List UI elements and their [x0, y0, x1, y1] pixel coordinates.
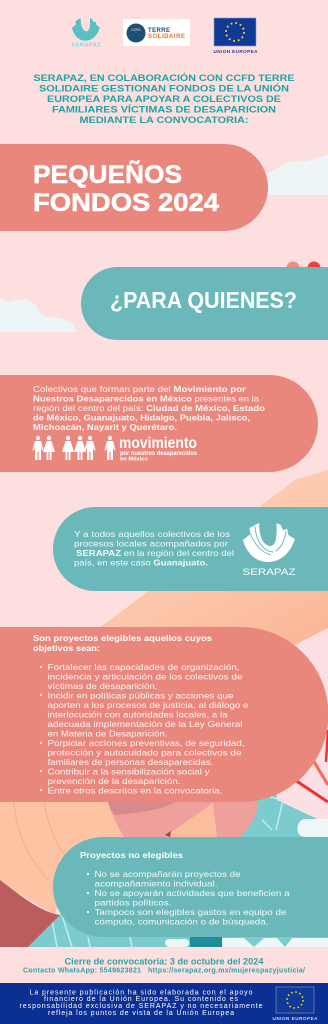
- text: disclaimer: financiero de la Unión Europea. Su contenido es: [44, 996, 239, 1003]
- logo: Unión Europea flag: [214, 18, 258, 54]
- logo: SERAPAZ header: SERAPAZ: [72, 42, 101, 48]
- panel: Pequeños Fondos title: FONDOS 2024: [33, 189, 219, 217]
- list: elegibles: prevención de la desaparición.: [48, 776, 180, 786]
- logo: CCFD Terre Solidaire: [123, 19, 190, 46]
- text: disclaimer: refleja los puntos de vista de la Unión Europea: [48, 1010, 234, 1017]
- list: elegibles: Porpiciar acciones preventivas, de seguridad,: [48, 738, 245, 748]
- list: elegibles: incidencia y articulación de los colectivos de: [48, 672, 243, 682]
- panel: Pequeños Fondos title: PEQUEÑOS: [33, 159, 182, 189]
- list: elegibles: protección y autocuidado para colectivos de: [48, 748, 242, 758]
- list: elegibles: Fortalecer las capacidades de organización,: [48, 662, 239, 672]
- icon: people figures: [32, 436, 116, 460]
- logo: CCFD Terre Solidaire: TERRE: [148, 28, 170, 34]
- logo: Unión Europea footer: UNION EUROPEA: [272, 1016, 318, 1021]
- list: no elegibles: cómputo, comunicación o de búsqueda.: [94, 916, 268, 926]
- text: elegibles heading: Son proyectos elegibles aquellos cuyos: [33, 633, 212, 643]
- list: elegibles: [40, 662, 249, 796]
- list: elegibles: aporten a los procesos de justicia, al diálogo e: [48, 700, 249, 710]
- intro heading: [34, 72, 294, 125]
- logo: Unión Europea footer: [272, 987, 318, 1021]
- list: elegibles: en Materia de Desaparición.: [48, 728, 168, 738]
- footer band: pink: [0, 947, 328, 983]
- logo: Movimiento: por nuestros desaparecidos: [120, 451, 198, 457]
- text: colectivos description: Michoacán, Nayarit y Querétaro.: [33, 422, 177, 432]
- logo: Movimiento: en México: [120, 456, 149, 462]
- list: elegibles: Contribuir a la sensibilización social y: [48, 766, 210, 776]
- list: no elegibles: acompañamiento individual.: [94, 878, 218, 888]
- panel: colectivos: [0, 375, 318, 472]
- intro heading: SOLIDAIRE GESTIONAN FONDOS DE LA UNIÓN: [39, 82, 289, 94]
- text: no elegibles heading: Proyectos no elegibles: [80, 850, 183, 860]
- logo: SERAPAZ: SERAPAZ: [242, 567, 296, 578]
- list: elegibles: víctimas de desaparición.: [48, 681, 158, 691]
- text: cierre de convocatoria: Cierre de convocatoria: 3 de octubre del 2024: [64, 956, 264, 966]
- background illustration: [0, 470, 328, 947]
- decorative hearts: [286, 262, 320, 274]
- list: elegibles: adecuada implementación de la Ley General: [48, 719, 243, 729]
- decorative cloud right: [262, 155, 328, 195]
- logo: CCFD Terre Solidaire: SOLIDAIRE: [148, 34, 185, 40]
- text: disclaimer: La presente publicación ha sido elaborada con el apoyo: [30, 990, 253, 996]
- list: elegibles: familiares de personas desaparecidas.: [48, 757, 213, 767]
- text: colectivos description: Colectivos que forman parte del Movimiento por: [33, 384, 237, 394]
- text: contacto: Contacto WhatsApp: 5549623821 https://serapaz.org.mx/mujerespazyjusticia/: [23, 968, 305, 974]
- list: elegibles: Incidir en políticas públicas y acciones que: [48, 690, 234, 700]
- list: elegibles: Entre otros descritos en la convocatoria.: [48, 786, 222, 796]
- intro heading: MEDIANTE LA CONVOCATORIA:: [80, 114, 248, 125]
- panel: ¿Para quienes?: ¿PARA QUIENES?: [110, 287, 297, 313]
- list: no elegibles: No se apoyarán actividades que beneficien a: [94, 888, 290, 898]
- footer band: blue: [0, 983, 328, 1024]
- logo: Movimiento: movimiento: [119, 435, 197, 452]
- panel: ¿Para quienes?: [81, 267, 328, 340]
- list: no elegibles: [87, 869, 290, 926]
- text: procesos locales: Y a todos aquellos colectivos de los: [74, 529, 230, 539]
- text: elegibles heading: objetivos sean:: [33, 643, 100, 653]
- text: disclaimer: [20, 990, 263, 1017]
- text: colectivos description: Nuestros Desaparecidos en México presentes en la: [33, 394, 253, 404]
- text: procesos locales: SERAPAZ en la región del centro del: [76, 548, 222, 558]
- panel: proyectos no elegibles: [53, 837, 328, 937]
- text: procesos locales: procesos locales acompañados por: [74, 538, 228, 548]
- panel: proyectos elegibles: [0, 627, 328, 802]
- text: disclaimer: responsabilidad exclusiva de SERAPAZ y no necesariamente: [20, 1003, 263, 1010]
- logo: CCFD Terre Solidaire: CCFD: [131, 28, 141, 32]
- list: elegibles: interlocución con autoridades locales, a la: [48, 710, 228, 720]
- logo: Movimiento: [32, 435, 198, 462]
- logo: SERAPAZ: [242, 523, 296, 578]
- logo: Unión Europea flag: UNION EUROPEA: [214, 49, 258, 54]
- list: no elegibles: No se acompañarán proyectos de: [94, 869, 241, 879]
- list: no elegibles: Tampoco son elegibles gastos en equipo de: [94, 907, 287, 917]
- text: colectivos description: de México, Guanajuato, Hidalgo, Puebla, Jalisco,: [33, 412, 250, 422]
- text: colectivos description: región del centro del país: Ciudad de México, Estado: [33, 403, 253, 413]
- logo: SERAPAZ header: [72, 18, 101, 48]
- intro heading: FAMILIARES VÍCTIMAS DE DESAPARICION: [52, 104, 276, 114]
- list: no elegibles: partidos políticos.: [94, 898, 172, 908]
- panel: procesos locales: [53, 507, 328, 591]
- text: procesos locales: país, en este caso Guanajuato.: [74, 558, 203, 568]
- decorative cloud left: [0, 298, 76, 332]
- intro heading: EUROPEA PARA APOYAR A COLECTIVOS DE: [47, 93, 281, 104]
- panel: Pequeños Fondos title: [0, 144, 268, 231]
- intro heading: SERAPAZ, EN COLABORACIÓN CON CCFD TERRE: [34, 72, 294, 83]
